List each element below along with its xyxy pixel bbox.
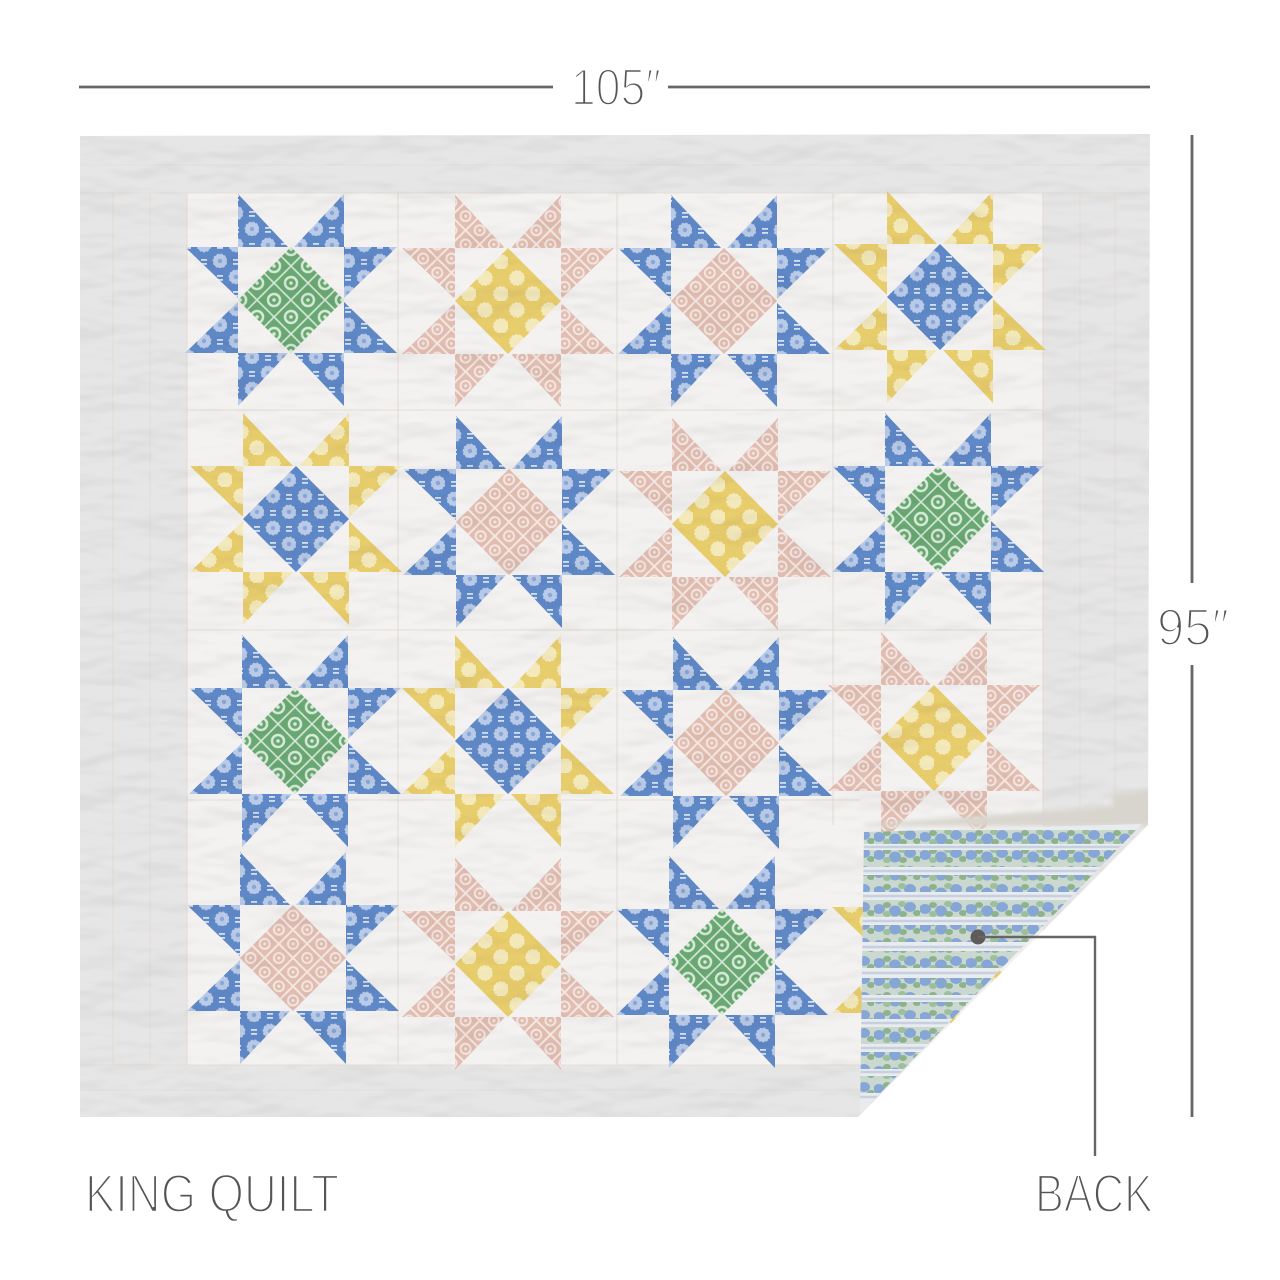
centre diamond <box>671 248 777 354</box>
star points <box>185 194 397 406</box>
label: back: BACK <box>1035 1164 1153 1224</box>
centre diamond <box>673 690 779 796</box>
star row 1, block 4 <box>834 191 1046 403</box>
star points <box>832 413 1044 625</box>
star row 1, block 2 <box>402 195 614 407</box>
star points <box>187 852 399 1064</box>
star row 2, block 3 <box>619 418 831 630</box>
centre diamond <box>887 244 993 350</box>
centre diamond <box>455 911 561 1017</box>
star points <box>618 195 830 407</box>
star points <box>403 416 615 628</box>
star row 4, block 1 <box>187 852 399 1064</box>
star points <box>834 191 1046 403</box>
width dimension: 105 inches: 105″ <box>571 59 661 117</box>
centre diamond <box>240 905 346 1011</box>
star points <box>828 632 1040 844</box>
star points <box>190 413 402 625</box>
star points <box>620 637 832 849</box>
star points <box>619 418 831 630</box>
star row 3, block 2 <box>402 635 614 847</box>
star points <box>402 858 614 1070</box>
centre diamond <box>243 466 349 572</box>
floral stripes <box>860 830 1150 1093</box>
star row 2, block 4 <box>832 413 1044 625</box>
folded corner showing quilt back <box>858 822 1150 1118</box>
star row 3, block 4 <box>828 632 1040 844</box>
label: king quilt: KING QUILT <box>85 1164 339 1224</box>
star row 1, block 3 <box>618 195 830 407</box>
folded corner shadow <box>864 790 1152 826</box>
height dimension: 95 inches: 95″ <box>1157 599 1229 657</box>
centre diamond <box>242 688 348 794</box>
centre diamond <box>672 471 778 577</box>
star row 1, block 1 <box>185 194 397 406</box>
centre diamond <box>455 688 561 794</box>
star row 2, block 2 <box>403 416 615 628</box>
star row 4, block 2 <box>402 858 614 1070</box>
star row 2, block 1 <box>190 413 402 625</box>
quilt front <box>78 132 1152 1120</box>
centre diamond <box>238 247 344 353</box>
centre diamond <box>881 685 987 791</box>
star row 4, block 3 <box>616 856 828 1068</box>
star points <box>189 635 401 847</box>
centre diamond <box>455 248 561 354</box>
star row 3, block 3 <box>620 637 832 849</box>
centre diamond <box>885 466 991 572</box>
fabric wrinkles <box>78 132 1152 1120</box>
star row 4, block 4 (mostly hidden by folded corner) <box>832 854 1044 1066</box>
star points <box>616 856 828 1068</box>
callout: back <box>970 930 1095 1156</box>
centre diamond <box>669 909 775 1015</box>
centre diamond <box>456 469 562 575</box>
star points <box>402 195 614 407</box>
star row 3, block 1 <box>189 635 401 847</box>
star points <box>402 635 614 847</box>
